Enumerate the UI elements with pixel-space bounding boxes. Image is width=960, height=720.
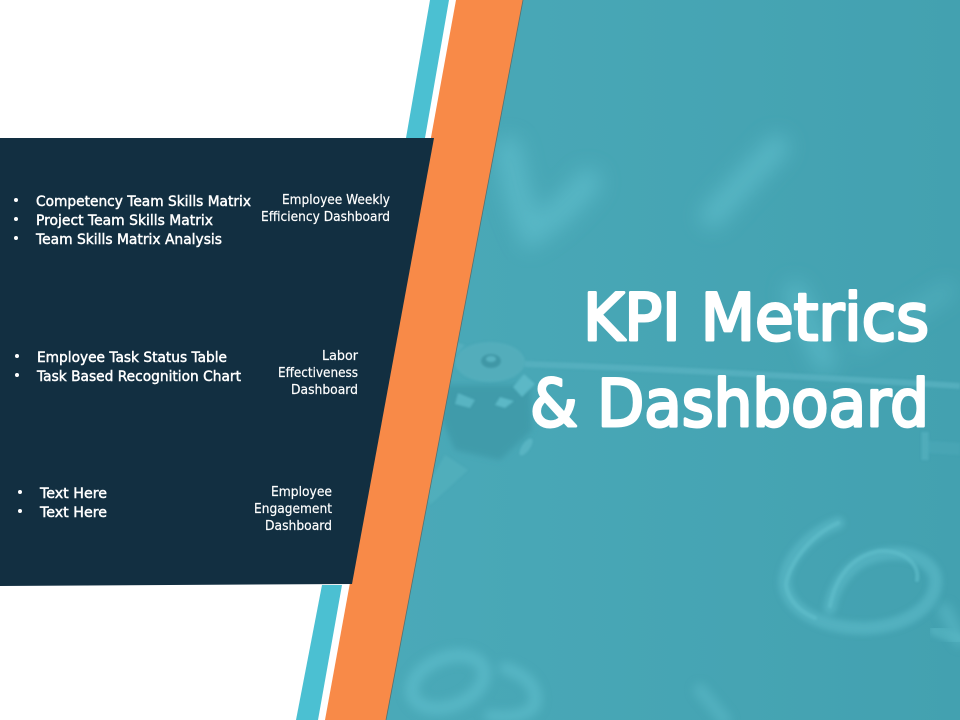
bullet list: team skills matrix: [14, 194, 251, 248]
label: labor effectiveness dashboard: [278, 349, 359, 398]
label: employee engagement dashboard: [254, 485, 332, 534]
label: labor effectiveness dashboard: Dashboard: [291, 383, 358, 398]
bullet list: team skills matrix: Project Team Skills Matrix: [36, 213, 213, 229]
decorative stripe: light blue upper: [406, 0, 449, 138]
label: labor effectiveness dashboard: Effectiveness: [278, 366, 358, 381]
label: employee engagement dashboard: Dashboard: [265, 519, 332, 534]
bullet list: text here: Text Here: [39, 505, 107, 521]
bullet list: text here: [18, 486, 107, 521]
label: employee engagement dashboard: Engagement: [254, 502, 332, 517]
label: employee weekly efficiency dashboard: [261, 193, 390, 225]
label: employee engagement dashboard: Employee: [271, 485, 332, 500]
bullet list: task status: [15, 350, 241, 385]
band edge line: [386, 0, 523, 720]
orange diagonal band: [325, 0, 523, 720]
panel: teal photo background: [386, 0, 960, 720]
decorative stripe: light blue lower: [296, 585, 342, 720]
bullet list: team skills matrix: Competency Team Skills Matrix: [36, 194, 251, 210]
label: employee weekly efficiency dashboard: Employee Weekly: [282, 193, 390, 208]
title: KPI Metrics: [583, 281, 929, 356]
bullet list: task status: Task Based Recognition Chart: [36, 369, 241, 385]
title: & Dashboard: [530, 367, 929, 442]
bullet list: task status: Employee Task Status Table: [37, 350, 227, 366]
bullet list: text here: Text Here: [39, 486, 107, 502]
bullet list: team skills matrix: Team Skills Matrix Analysis: [35, 232, 222, 248]
title: [530, 281, 929, 442]
label: employee weekly efficiency dashboard: Efficiency Dashboard: [261, 210, 390, 225]
label: labor effectiveness dashboard: Labor: [322, 349, 359, 364]
panel: dark navy content block: [0, 138, 434, 586]
